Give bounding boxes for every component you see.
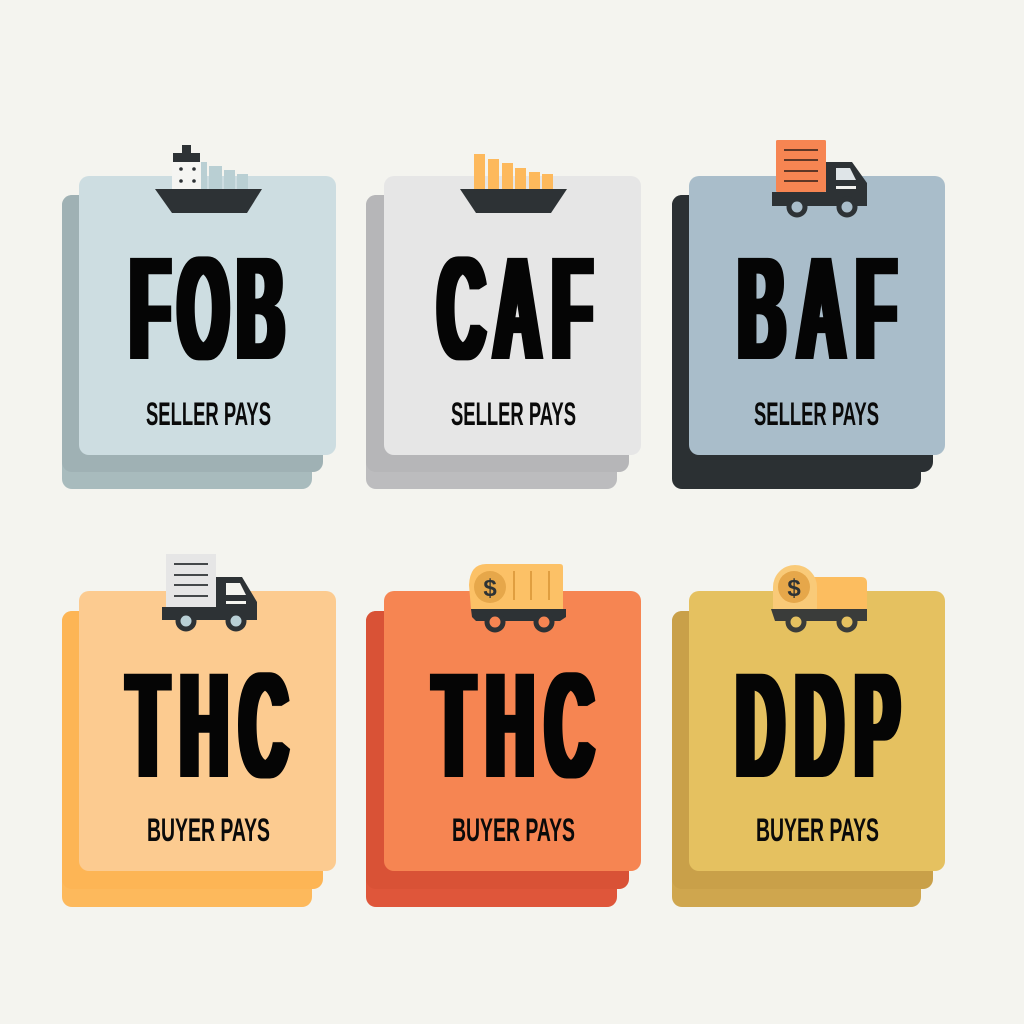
heading: BAF: BAF <box>738 227 896 391</box>
panel: CAF card <box>366 154 641 489</box>
icon: cargo truck with dollar coin <box>469 564 566 630</box>
panel: DDP card <box>672 565 945 907</box>
heading: CAF: CAF <box>438 227 592 391</box>
icon: truck with document <box>772 140 867 215</box>
heading: THC: THC <box>434 641 593 809</box>
panel: THC card, deep orange <box>366 564 641 907</box>
text: buyer pays: BUYER PAYS <box>452 812 575 848</box>
text: seller pays: SELLER PAYS <box>146 396 271 432</box>
text: seller pays: SELLER PAYS <box>451 396 576 432</box>
panel: THC card, light orange <box>62 554 336 907</box>
heading: DDP: DDP <box>736 641 899 809</box>
heading: FOB: FOB <box>130 227 284 391</box>
icon: truck with paper document <box>162 554 257 629</box>
text: seller pays: SELLER PAYS <box>754 396 879 432</box>
heading: THC: THC <box>128 641 287 809</box>
icon: flatbed truck with dollar coin: $ <box>787 575 801 602</box>
icon: cargo ship with orange containers <box>460 154 567 213</box>
text: buyer pays: BUYER PAYS <box>147 812 270 848</box>
panel: BAF card <box>672 140 945 489</box>
icon: cargo truck with dollar coin: $ <box>483 575 497 602</box>
text: buyer pays: BUYER PAYS <box>756 812 879 848</box>
icon: flatbed truck with dollar coin <box>771 565 867 630</box>
icon: container ship <box>155 145 262 213</box>
panel: FOB card <box>62 145 336 489</box>
